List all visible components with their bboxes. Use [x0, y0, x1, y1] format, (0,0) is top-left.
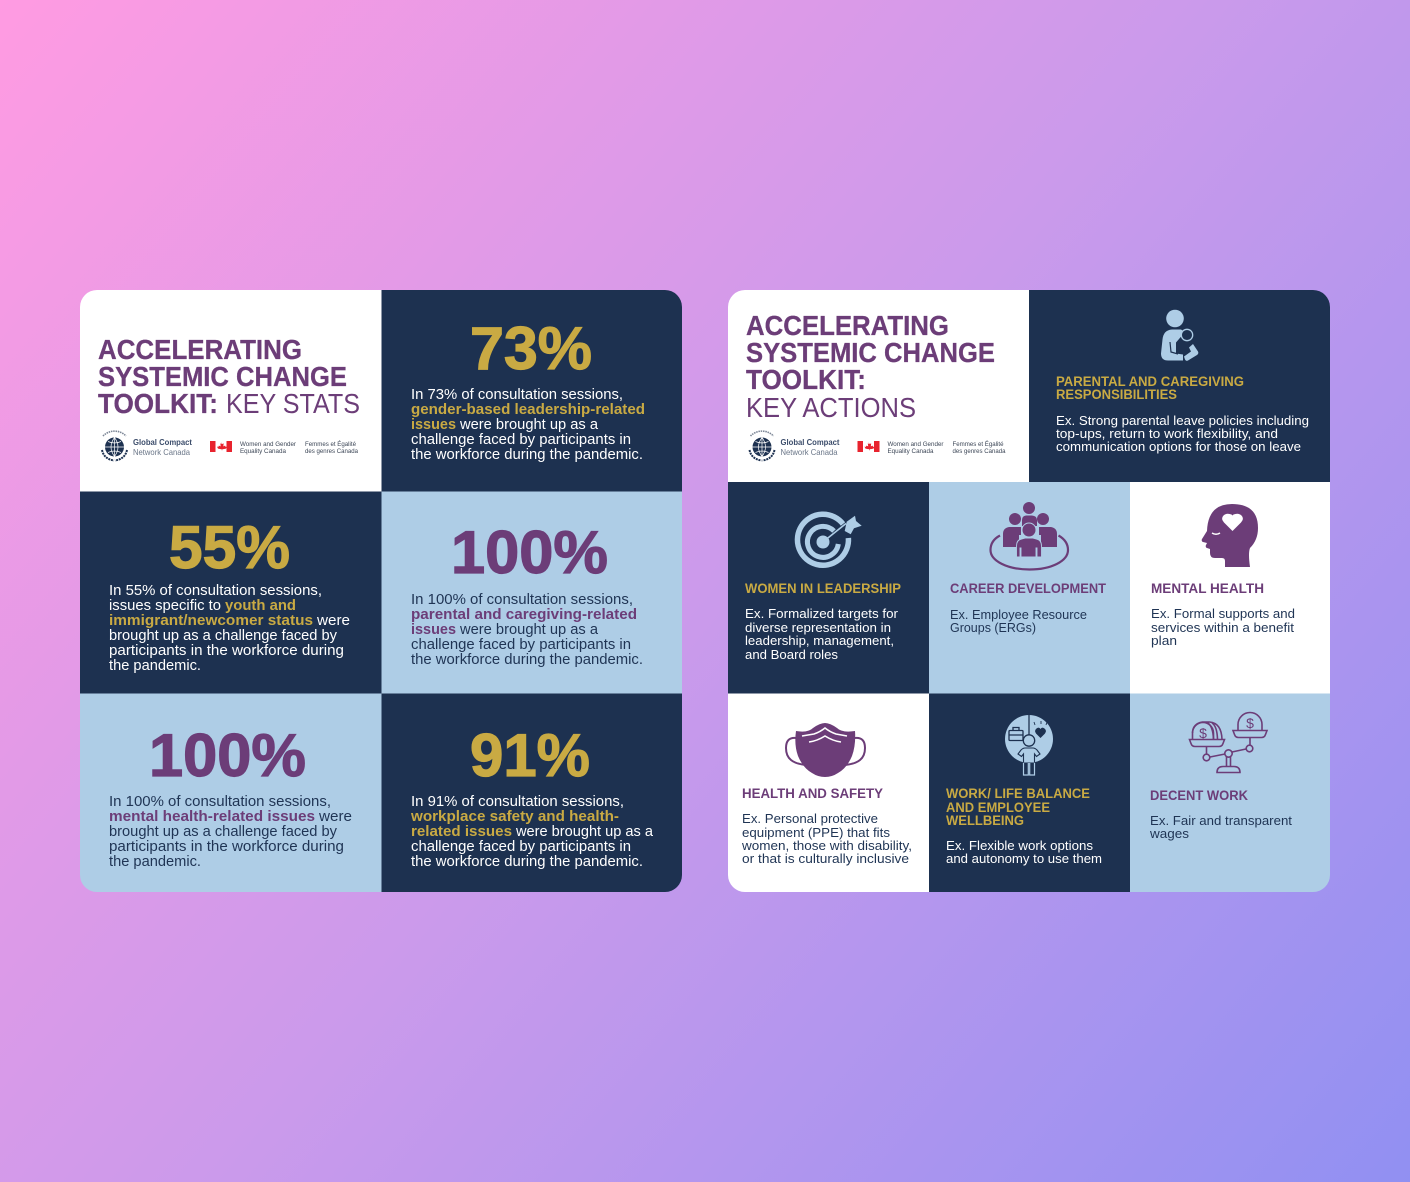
- text block: 55% description: immigrant/newcomer status: [109, 613, 313, 629]
- text block: work life balance example: [946, 838, 1102, 866]
- text block: 100% mental health description: mental health-related issues: [109, 809, 315, 825]
- text block: 73% description: the workforce during the pandemic.: [411, 447, 643, 463]
- text block: 91% description: [410, 794, 654, 870]
- text block: 73% description: In 73% of consultation sessions,: [411, 387, 623, 403]
- heading: parental and caregiving: RESPONSIBILITIES: [1056, 387, 1177, 402]
- heading: mental health: MENTAL HEALTH: [1151, 581, 1264, 596]
- heading: parental and caregiving: [1056, 374, 1244, 402]
- text block: 100% parental description: challenge faced by participants in: [411, 637, 631, 653]
- text block: 100% mental health description: [109, 794, 352, 870]
- icon: scale with coins: $: [1199, 725, 1207, 741]
- text block: 73% description: gender-based leadership-related: [411, 402, 645, 418]
- text block: 55% description: participants in the workforce during: [109, 643, 344, 659]
- heading: key actions title: KEY ACTIONS: [746, 392, 916, 423]
- text block: 100% mental health description: the pandemic.: [109, 854, 201, 870]
- logos: Global Compact and Women and Gender Equality Canada: des genres Canada: [305, 448, 359, 455]
- text block: 100% parental description: [411, 592, 643, 668]
- text block: women in leadership example: and Board roles: [745, 647, 839, 662]
- logos: Global Compact and Women and Gender Equality Canada: Network Canada: [133, 447, 190, 457]
- heading: key actions title: SYSTEMIC CHANGE: [746, 337, 995, 368]
- icon: scale with coins: $: [1246, 715, 1254, 731]
- logos: Global Compact and Women and Gender Equality Canada: Global Compact: [133, 437, 192, 447]
- text block: 91% description: In 91% of consultation sessions,: [411, 794, 624, 810]
- text block: decent work example: [1149, 813, 1292, 841]
- text block: women in leadership example: Ex. Formalized targets for: [745, 606, 899, 621]
- text block: 55% description: issues specific to: [109, 598, 221, 614]
- text block: career development example: Ex. Employee Resource: [950, 607, 1087, 622]
- text block: women in leadership example: diverse representation in: [745, 620, 891, 635]
- heading: work life balance: WELLBEING: [946, 813, 1024, 828]
- heading: key stats title: ACCELERATING: [98, 334, 302, 365]
- heading: key stats title: [98, 334, 360, 419]
- logos: Global Compact and Women and Gender Equality Canada: Equality Canada: [888, 448, 934, 455]
- icon: scale with coins: [1190, 712, 1267, 772]
- logos: Global Compact and Women and Gender Equality Canada: Femmes et Égalité: [952, 441, 1004, 448]
- heading: parental and caregiving: PARENTAL AND CAREGIVING: [1056, 374, 1244, 389]
- text block: 100% parental description: issues: [411, 622, 456, 638]
- text block: women in leadership example: leadership, management,: [745, 633, 894, 648]
- text block: 91% description: the workforce during the pandemic.: [411, 854, 643, 870]
- heading: women in leadership: WOMEN IN LEADERSHIP: [745, 581, 901, 596]
- stat: 55%: 55%: [169, 514, 290, 581]
- stat: 100% mental health: 100%: [149, 722, 306, 789]
- heading: decent work: DECENT WORK: [1150, 788, 1248, 803]
- logos: Global Compact and Women and Gender Equality Canada: Network Canada: [780, 447, 838, 457]
- heading: key actions title: TOOLKIT:: [746, 364, 866, 395]
- logos: Global Compact and Women and Gender Equality Canada: Equality Canada: [240, 448, 287, 455]
- text block: health and safety example: or that is culturally inclusive: [742, 851, 909, 866]
- heading: work life balance: [946, 786, 1090, 828]
- heading: work life balance: WORK/ LIFE BALANCE: [946, 786, 1090, 801]
- icon: face mask: [786, 723, 865, 777]
- logos: Global Compact and Women and Gender Equality Canada: Women and Gender: [888, 441, 944, 448]
- heading: key stats title: KEY STATS: [226, 388, 360, 419]
- text block: career development example: Groups (ERGs): [950, 620, 1036, 635]
- text block: health and safety example: [741, 811, 912, 866]
- icon: head with heart: [1202, 504, 1258, 567]
- text block: 73% description: [411, 387, 645, 463]
- text block: 73% description: challenge faced by participants in: [411, 432, 631, 448]
- text block: health and safety example: women, those with disability,: [741, 838, 912, 853]
- text block: decent work example: wages: [1149, 826, 1190, 841]
- text block: health and safety example: equipment (PPE) that fits: [742, 825, 891, 840]
- panel: key actions: [728, 290, 1330, 892]
- text block: 55% description: were: [316, 613, 350, 629]
- icon: target with arrow: [797, 514, 862, 565]
- panel: key stats: [80, 290, 682, 892]
- text block: parental example: [1056, 413, 1309, 454]
- heading: work life balance: AND EMPLOYEE: [946, 800, 1050, 815]
- text block: work life balance example: Ex. Flexible work options: [946, 838, 1094, 853]
- stat: 91%: 91%: [470, 722, 590, 789]
- text block: 55% description: [109, 583, 350, 674]
- heading: key actions title: ACCELERATING: [746, 310, 949, 341]
- text block: 100% parental description: parental and caregiving-related: [411, 607, 637, 623]
- icon: group of people in a ring: [990, 502, 1068, 570]
- text block: 100% parental description: the workforce during the pandemic.: [411, 652, 643, 668]
- text block: parental example: top-ups, return to work flexibility, and: [1056, 426, 1278, 441]
- text block: 91% description: related issues: [411, 824, 512, 840]
- logos: Global Compact and Women and Gender Equality Canada: [102, 431, 359, 460]
- heading: key stats title: TOOLKIT:: [98, 388, 218, 419]
- text block: career development example: [950, 607, 1087, 635]
- text block: health and safety example: Ex. Personal protective: [742, 811, 878, 826]
- heading: health and safety: HEALTH AND SAFETY: [742, 786, 883, 801]
- text block: mental health example: plan: [1151, 633, 1177, 648]
- logos: Global Compact and Women and Gender Equality Canada: Women and Gender: [240, 441, 296, 448]
- text block: 91% description: workplace safety and health-: [410, 809, 619, 825]
- text block: 55% description: In 55% of consultation sessions,: [109, 583, 322, 599]
- text block: 91% description: were brought up as a: [515, 824, 654, 840]
- text block: 100% mental health description: were: [318, 809, 352, 825]
- text block: parental example: communication options for those on leave: [1056, 439, 1301, 454]
- text block: 91% description: challenge faced by participants in: [411, 839, 631, 855]
- text block: 55% description: brought up as a challenge faced by: [109, 628, 338, 644]
- logos: Global Compact and Women and Gender Equality Canada: [750, 431, 1006, 460]
- text block: 100% parental description: In 100% of consultation sessions,: [411, 592, 633, 608]
- text block: mental health example: services within a benefit: [1151, 620, 1294, 635]
- stat: 100% parental: 100%: [451, 519, 608, 586]
- text block: 100% mental health description: participants in the workforce during: [109, 839, 344, 855]
- text block: 100% mental health description: In 100% of consultation sessions,: [109, 794, 331, 810]
- logos: Global Compact and Women and Gender Equality Canada: des genres Canada: [952, 448, 1006, 455]
- text block: mental health example: Ex. Formal supports and: [1151, 606, 1295, 621]
- heading: key actions title: [746, 310, 995, 423]
- text block: 100% parental description: were brought up as a: [459, 622, 599, 638]
- text block: 55% description: the pandemic.: [109, 658, 201, 674]
- icon: work life balance person: [1005, 715, 1053, 775]
- text block: 73% description: issues: [411, 417, 456, 433]
- icon: parent holding child: [1161, 310, 1198, 361]
- text block: 100% mental health description: brought up as a challenge faced by: [109, 824, 338, 840]
- text block: women in leadership example: [745, 606, 899, 662]
- text block: work life balance example: and autonomy to use them: [946, 851, 1102, 866]
- text block: parental example: Ex. Strong parental leave policies including: [1056, 413, 1309, 428]
- heading: career development: CAREER DEVELOPMENT: [950, 581, 1107, 596]
- stat: 73%: 73%: [470, 315, 592, 382]
- text block: 55% description: youth and: [225, 598, 296, 614]
- text block: mental health example: [1151, 606, 1295, 648]
- logos: Global Compact and Women and Gender Equality Canada: Femmes et Égalité: [305, 441, 357, 448]
- logos: Global Compact and Women and Gender Equality Canada: Global Compact: [780, 437, 840, 447]
- heading: key stats title: SYSTEMIC CHANGE: [98, 361, 347, 392]
- text block: decent work example: Ex. Fair and transparent: [1150, 813, 1292, 828]
- text block: 73% description: were brought up as a: [459, 417, 599, 433]
